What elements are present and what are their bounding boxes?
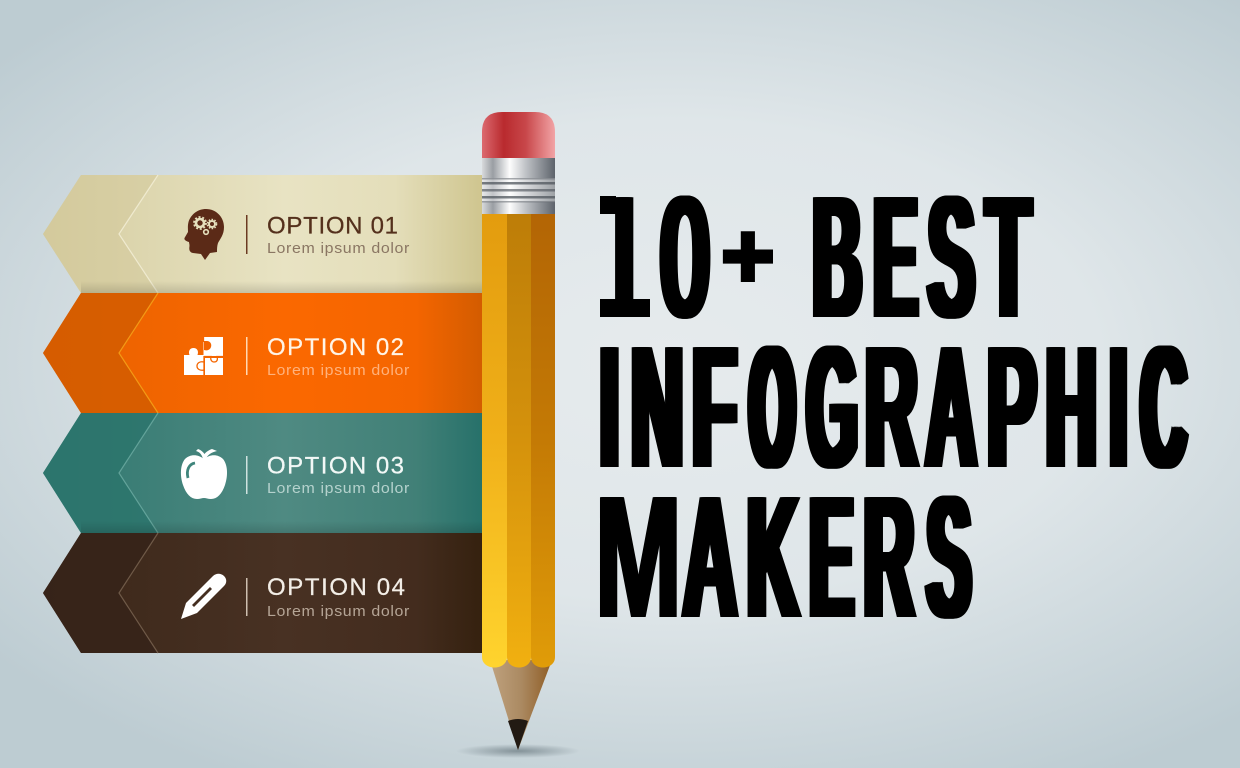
title line 1: 1 bbox=[604, 159, 640, 354]
pencil ferrule bbox=[482, 158, 555, 214]
title line 1: + bbox=[721, 205, 775, 307]
title line 3 bbox=[595, 459, 973, 654]
pencil lead bbox=[508, 719, 528, 750]
title line 2: O bbox=[750, 309, 794, 504]
icon: head with gears bbox=[184, 209, 224, 260]
pencil body bbox=[482, 214, 555, 668]
pencil ground shadow bbox=[456, 744, 580, 758]
title line 3: E bbox=[810, 459, 853, 654]
panel: option 02 bbox=[43, 293, 482, 413]
divider bbox=[246, 578, 248, 616]
icon: puzzle bbox=[184, 337, 223, 375]
label: option 02: OPTION 02 bbox=[267, 334, 404, 361]
title line 2: G bbox=[806, 309, 857, 504]
title line 1: B bbox=[813, 159, 861, 354]
panel: option 01 bbox=[43, 175, 482, 293]
title line 2: N bbox=[631, 309, 683, 504]
title line 3: R bbox=[864, 459, 914, 654]
title line 2: A bbox=[926, 309, 977, 504]
title line 2: I bbox=[600, 309, 617, 504]
title line 3: K bbox=[747, 459, 799, 654]
sublabel: Lorem ipsum dolor bbox=[267, 480, 410, 497]
icon: pencil illustration bbox=[456, 112, 580, 758]
title line 2: C bbox=[1141, 309, 1186, 504]
icon: pencil bbox=[181, 574, 226, 619]
icon: apple bbox=[181, 449, 227, 499]
divider bbox=[246, 215, 248, 254]
sublabel: Lorem ipsum dolor bbox=[267, 362, 410, 379]
title bbox=[595, 159, 1190, 654]
title line 2: F bbox=[692, 309, 737, 504]
divider bbox=[246, 337, 248, 375]
title line 1: T bbox=[986, 159, 1030, 354]
title line 1: S bbox=[928, 159, 974, 354]
pencil eraser bbox=[482, 112, 555, 158]
sublabel: Lorem ipsum dolor bbox=[267, 603, 410, 620]
title line 2: I bbox=[1110, 309, 1127, 504]
title line 1: E bbox=[874, 159, 917, 354]
label: option 01: OPTION 01 bbox=[267, 212, 398, 240]
panel: option 04 bbox=[43, 533, 482, 653]
sublabel: Lorem ipsum dolor bbox=[267, 240, 410, 257]
title line 2: H bbox=[1046, 309, 1097, 504]
title line 2: R bbox=[865, 309, 918, 504]
label: option 04: OPTION 04 bbox=[267, 574, 405, 601]
title line 2 bbox=[600, 309, 1190, 608]
title line 2: P bbox=[987, 309, 1036, 504]
title line 1: 0 bbox=[658, 159, 712, 354]
panel: option 03 bbox=[43, 413, 482, 533]
pencil wood tip bbox=[490, 660, 552, 750]
title line 3: M bbox=[595, 459, 681, 654]
divider bbox=[246, 456, 248, 494]
label: option 03: OPTION 03 bbox=[267, 452, 404, 480]
title line 3: S bbox=[927, 459, 971, 654]
title line 3: A bbox=[683, 459, 737, 654]
title line 1 bbox=[600, 159, 1034, 354]
